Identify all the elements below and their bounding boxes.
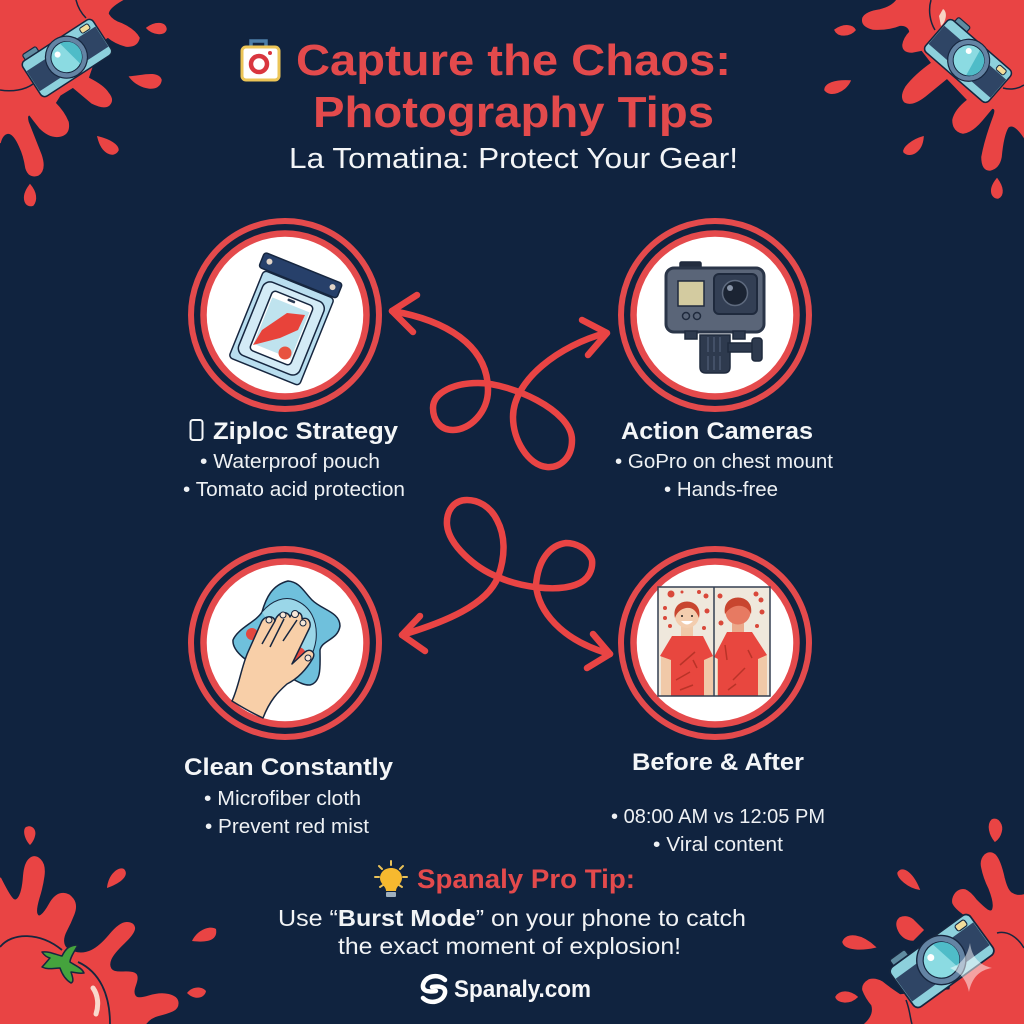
logo: Spanaly.com: Spanaly.com — [454, 976, 591, 1003]
text: pro tip body: the exact moment of explosion! — [338, 933, 681, 959]
heading: ziploc strategy: Ziploc Strategy — [213, 418, 399, 445]
right person — [714, 598, 767, 696]
icon: waterproof pouch — [223, 252, 343, 387]
title: Capture the Chaos: — [296, 36, 731, 85]
camera: top right — [923, 13, 1017, 104]
text: pro tip body: Use “Burst Mode ” on your phone to catch — [278, 905, 746, 931]
left person — [660, 602, 713, 696]
splatter: top left — [0, 0, 166, 206]
panel: ziploc strategy — [183, 221, 405, 501]
badge: before and after — [621, 549, 809, 737]
heading: clean constantly: Clean Constantly — [184, 754, 394, 781]
camera: top left — [17, 12, 114, 98]
text: before after bullets — [611, 806, 825, 856]
icon: hand wiping with cloth — [232, 581, 340, 718]
text: before after bullets: • 08:00 AM vs 12:05 PM — [611, 806, 825, 828]
text: action bullets: • Hands-free — [664, 479, 778, 501]
subtitle: La Tomatina: Protect Your Gear! — [289, 143, 738, 175]
panel: action cameras — [615, 221, 833, 501]
heading: before and after: Before & After — [632, 749, 804, 776]
text: before after bullets: • Viral content — [653, 834, 783, 856]
panel: before and after — [611, 549, 825, 856]
icon: phone — [190, 420, 202, 440]
text: clean bullets: • Microfiber cloth — [204, 788, 361, 810]
text: clean bullets: • Prevent red mist — [205, 816, 369, 838]
icon: camera bag — [242, 41, 279, 80]
tomato spots — [663, 590, 764, 630]
badge: ziploc strategy — [191, 221, 379, 409]
text: ziploc bullets: • Waterproof pouch — [200, 451, 380, 473]
text: action bullets: • GoPro on chest mount — [615, 451, 833, 473]
badge: action cameras — [621, 221, 809, 409]
text: ziploc bullets — [183, 451, 405, 501]
icon: tomato outline — [0, 936, 110, 1024]
illustration: before and after portraits — [658, 587, 770, 696]
icon: logo mark — [423, 976, 445, 1002]
arrows: bottom pair — [402, 500, 610, 668]
callout: pro tip — [278, 861, 746, 959]
text: pro tip body — [278, 905, 746, 959]
panel: clean constantly — [184, 549, 394, 838]
heading: action cameras: Action Cameras — [621, 418, 813, 445]
text: ziploc bullets: • Tomato acid protection — [183, 479, 405, 501]
title block — [242, 36, 738, 175]
text: action bullets — [615, 451, 833, 501]
splatter: bottom left with tomato — [0, 826, 216, 1024]
splatter: top right — [825, 0, 1024, 198]
icon: light bulb — [375, 861, 407, 897]
icon: action camera — [666, 262, 764, 373]
splatter: bottom right — [836, 819, 1024, 1024]
text: clean bullets — [204, 788, 369, 838]
title block: Photography Tips — [313, 88, 714, 137]
arrows: top pair — [392, 295, 607, 467]
heading: pro tip: Spanaly Pro Tip: — [417, 864, 635, 894]
camera: bottom right — [884, 907, 996, 1010]
watermark star — [950, 943, 992, 992]
badge: clean constantly — [191, 549, 379, 737]
